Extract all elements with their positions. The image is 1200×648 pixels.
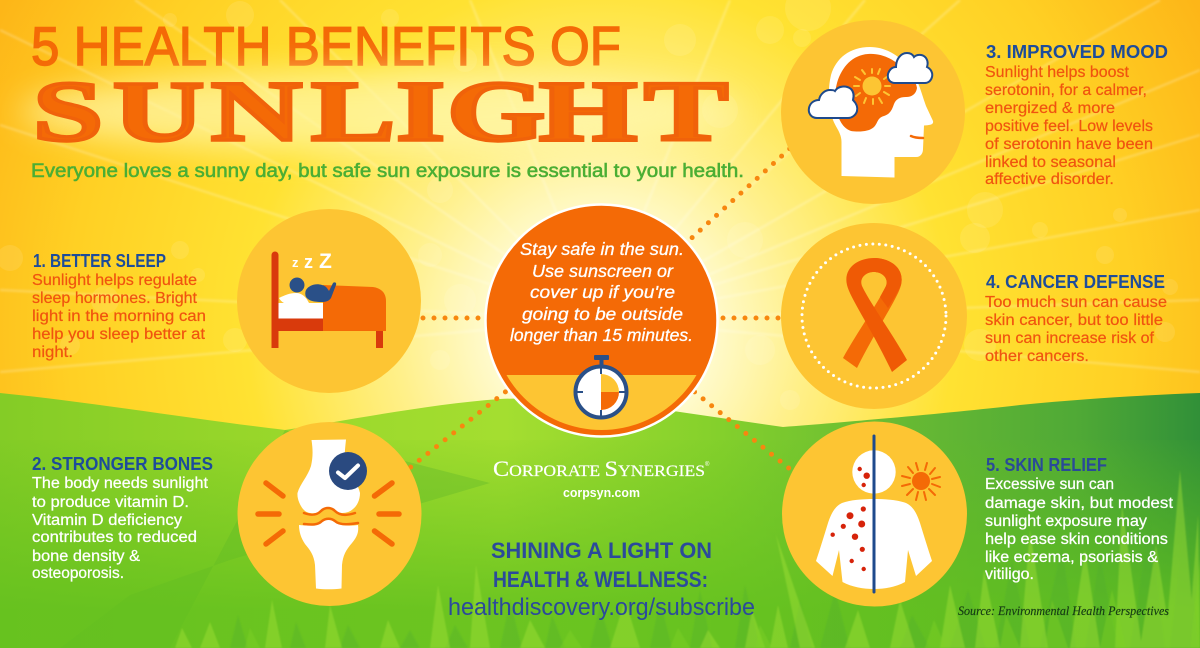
logo: corporate synergies: CORPORATE SYNERGIES (493, 456, 705, 481)
panel: improved mood icon (781, 20, 965, 204)
text: 1 better sleep: 1. BETTER SLEEP (33, 251, 166, 271)
text: 1 better sleep: light in the morning can (32, 308, 206, 325)
text: 3 improved mood (985, 42, 1168, 188)
text: 5 skin relief: like eczema, psoriasis & (985, 549, 1159, 566)
cloud right (888, 53, 932, 83)
text: 3 improved mood: affective disorder. (985, 171, 1114, 188)
safety text: longer than 15 minutes. (510, 325, 693, 345)
sleeping z letters: z (292, 255, 299, 270)
panel: center safety message (486, 204, 718, 436)
text: 2 stronger bones: bone density & (32, 548, 141, 565)
pillow (279, 293, 309, 303)
bed frame (272, 252, 383, 348)
dotted connector: center to better sleep (412, 316, 492, 320)
logo: corporate synergies: corpsyn.com (563, 485, 640, 500)
call to action: shining a light on health and wellness (448, 538, 755, 621)
text: 2 stronger bones: Vitamin D deficiency (32, 512, 182, 529)
divider line (872, 436, 876, 592)
cloud left (809, 87, 857, 118)
background: green hills (0, 393, 1200, 648)
skin spots (830, 467, 870, 571)
safety text: Stay safe in the sun. (520, 239, 684, 259)
text: 4 cancer defense (985, 272, 1167, 365)
text: 3 improved mood: linked to seasonal (985, 154, 1116, 171)
brain sun (854, 69, 890, 104)
text: 5 skin relief: Excessive sun can (985, 476, 1114, 493)
head silhouette (829, 47, 933, 178)
logo: corporate synergies: ® (705, 461, 710, 468)
brain (835, 54, 917, 132)
text: 4 cancer defense: other cancers. (985, 348, 1089, 365)
logo: corporate synergies (493, 456, 710, 500)
safety text: cover up if you're (530, 282, 675, 302)
text: 3 improved mood: Sunlight helps boost (985, 64, 1130, 81)
text: 3 improved mood: positive feel. Low levels (985, 118, 1153, 135)
yellow segment (506, 375, 696, 430)
tibia (299, 519, 358, 589)
sleeping z letters: z (304, 252, 313, 272)
text: 4 cancer defense: Too much sun can cause (985, 294, 1167, 311)
text: 2 stronger bones: osteoporosis. (32, 565, 124, 582)
dotted connector: center to skin relief (686, 385, 796, 474)
sun (902, 463, 940, 500)
ribbon (843, 258, 907, 372)
panel: skin relief icon (782, 422, 967, 606)
dotted connector: center to stronger bones (402, 385, 514, 474)
dotted ring (802, 244, 946, 388)
text: 5 skin relief: help ease skin conditions (985, 531, 1168, 548)
text: 1 better sleep: night. (32, 344, 73, 361)
text: 1 better sleep: sleep hormones. Bright (32, 290, 198, 307)
text: 4 cancer defense: 4. CANCER DEFENSE (986, 272, 1165, 292)
background: grass blades (175, 470, 1200, 648)
pain rays (258, 483, 399, 544)
panel: better sleep icon (237, 209, 421, 393)
text: 1 better sleep: Sunlight helps regulate (32, 272, 197, 289)
text: 2 stronger bones: The body needs sunlight (32, 475, 209, 492)
sleeper (290, 278, 336, 302)
text: 2 stronger bones: contributes to reduced (32, 529, 197, 546)
call to action: shining a light on health and wellness: SHINING A LIGHT ON (491, 538, 712, 563)
sleeping z letters: Z (319, 250, 332, 273)
text: 5 skin relief: sunlight exposure may (985, 513, 1147, 530)
text: 5 skin relief: 5. SKIN RELIEF (986, 455, 1107, 475)
text: 1 better sleep (32, 251, 206, 361)
text: 3 improved mood: energized & more (985, 100, 1115, 117)
title: 5 health benefits of: 5 HEALTH BENEFITS OF (31, 15, 621, 77)
source citation: Source: Environmental Health Perspectives (958, 604, 1169, 618)
tagline: Everyone loves a sunny day, but safe sun exposure is essential to your health. (31, 161, 744, 182)
mattress (278, 303, 324, 318)
sleeping z letters (292, 250, 332, 273)
panel: stronger bones icon (238, 422, 422, 606)
text: 5 skin relief: damage skin, but modest (985, 495, 1174, 512)
text: 1 better sleep: help you sleep better at (32, 326, 206, 343)
dotted connector: center to improved mood (684, 143, 796, 245)
blanket (323, 285, 386, 331)
dotted connector: center to cancer defense (712, 316, 792, 320)
panel: cancer defense icon (781, 223, 967, 409)
text: 3 improved mood: serotonin, for a calmer, (985, 82, 1147, 99)
torso (816, 499, 932, 589)
text: 3 improved mood: of serotonin have been (985, 136, 1153, 153)
head (852, 450, 896, 494)
safety text: Use sunscreen or (532, 261, 674, 281)
call to action: shining a light on health and wellness: HEALTH & WELLNESS: (493, 567, 708, 592)
safety text: going to be outside (522, 304, 683, 324)
text: 2 stronger bones (32, 454, 213, 582)
text: 3 improved mood: 3. IMPROVED MOOD (986, 42, 1168, 62)
safety text (510, 239, 693, 345)
text: 4 cancer defense: skin cancer, but too little (985, 312, 1163, 329)
background: sun rays and bokeh (0, 0, 1200, 410)
femur (297, 440, 360, 513)
icon: stopwatch (575, 355, 627, 418)
text: 2 stronger bones: to produce vitamin D. (32, 494, 189, 511)
smile (911, 136, 923, 138)
text: 5 skin relief: vitiligo. (985, 566, 1034, 583)
text: 5 skin relief (985, 455, 1174, 583)
text: 4 cancer defense: sun can increase risk of (985, 330, 1155, 347)
title: sunlight: SUNLIGHT (33, 64, 728, 159)
call to action: shining a light on health and wellness: healthdiscovery.org/subscribe (448, 594, 755, 621)
check badge (329, 452, 367, 490)
cartilage (304, 508, 358, 525)
text: 2 stronger bones: 2. STRONGER BONES (32, 454, 213, 474)
